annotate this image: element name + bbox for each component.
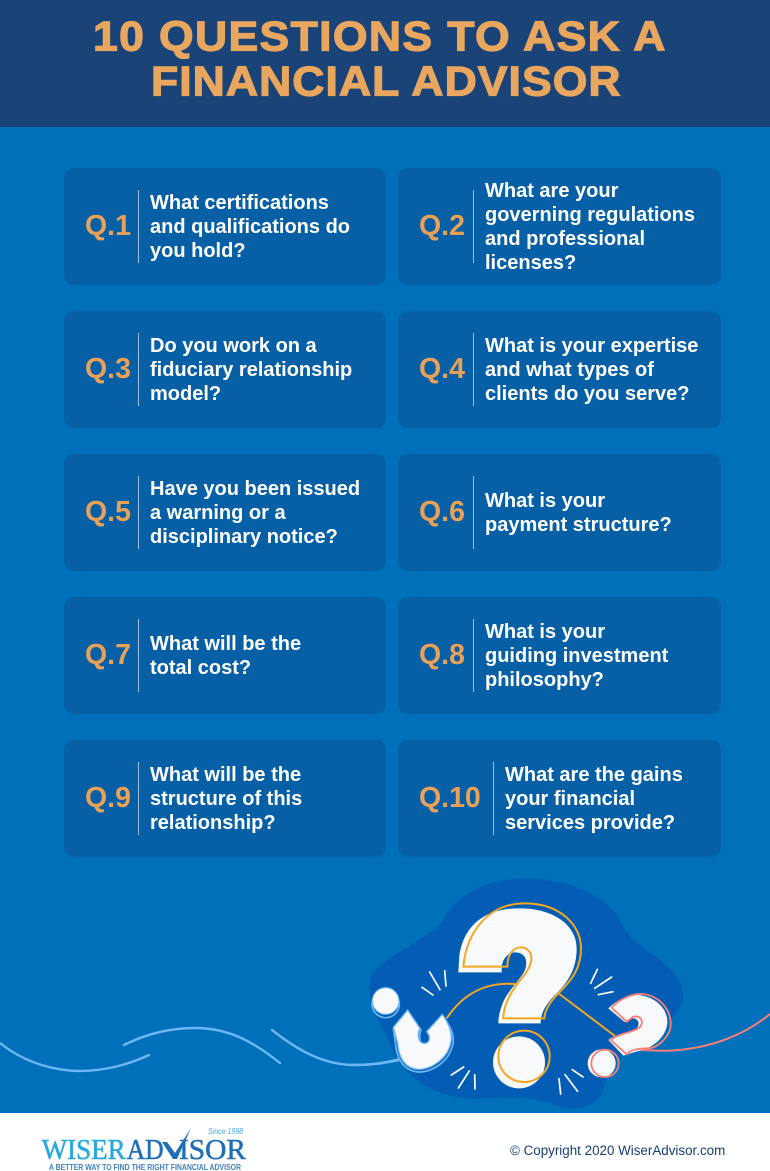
card: question 10: Q.10 [419, 782, 481, 814]
card: question 6: What is your [485, 490, 605, 512]
card: question 4 [398, 311, 721, 428]
card: question 4: clients do you serve? [485, 382, 690, 404]
card: question 10: What are the gains [505, 764, 683, 786]
card: question 8: Q.8 [419, 639, 465, 671]
card: question 10: your financial [505, 788, 635, 810]
card: question 5: disciplinary notice? [150, 526, 338, 548]
card: question 3 [64, 311, 386, 428]
logo: WiserAdvisor: AD [127, 1135, 164, 1166]
logo: WiserAdvisor: Since 1998 [208, 1127, 243, 1136]
card: question 9: Q.9 [85, 782, 131, 814]
card: question 5: Have you been issued [150, 478, 360, 500]
card: question 8: guiding investment [485, 644, 668, 666]
title [93, 14, 666, 105]
card: question 6: Q.6 [419, 496, 465, 528]
connecting lines [350, 984, 770, 1065]
card: question 2 [398, 168, 721, 285]
card: question 1 [64, 168, 386, 285]
card: question 2: What are your [485, 180, 618, 202]
title: FINANCIAL ADVISOR [151, 59, 621, 105]
logo: WiserAdvisor: WISER [42, 1135, 126, 1166]
card: question 5: a warning or a [150, 502, 286, 524]
card: question 3: Do you work on a [150, 334, 317, 356]
copyright: © Copyright 2020 WiserAdvisor.com [510, 1143, 725, 1158]
card: question 8 [398, 597, 721, 714]
illustration: question marks and wavy lines [0, 878, 770, 1108]
logo: WiserAdvisor: ISOR [179, 1135, 246, 1166]
card: question 3: fiduciary relationship [150, 358, 352, 380]
card: question 4: and what types of [485, 358, 654, 380]
card: question 4: Q.4 [419, 353, 465, 385]
big question mark [458, 903, 581, 1088]
card: question 2: governing regulations [485, 204, 695, 226]
card: question 4: What is your expertise [485, 334, 698, 356]
card: question 3: model? [150, 382, 221, 404]
card: question 7 [64, 597, 386, 714]
card: question 9: structure of this [150, 788, 302, 810]
card: question 7: Q.7 [85, 639, 131, 671]
card: question 7: total cost? [150, 656, 251, 678]
right question mark [588, 994, 671, 1077]
left inverted question mark [372, 988, 453, 1072]
card: question 5 [64, 454, 386, 571]
card: question 1: and qualifications do [150, 216, 350, 238]
card: question 8: What is your [485, 620, 605, 642]
card: question 5: Q.5 [85, 496, 131, 528]
card: question 6: payment structure? [485, 514, 672, 536]
card: question 10: services provide? [505, 812, 675, 834]
card: question 10 [398, 740, 721, 857]
card: question 1: you hold? [150, 240, 246, 262]
card: question 2: Q.2 [419, 210, 465, 242]
card: question 8: philosophy? [485, 668, 604, 690]
card: question 3: Q.3 [85, 353, 131, 385]
card: question 9 [64, 740, 386, 857]
card: question 6 [398, 454, 721, 571]
logo: WiserAdvisor [42, 1127, 246, 1171]
card: question 1: Q.1 [85, 210, 131, 242]
card: question 1: What certifications [150, 192, 329, 214]
card: question 7: What will be the [150, 632, 301, 654]
header band [0, 0, 770, 127]
footer band [0, 1113, 770, 1171]
card: question 2: and professional [485, 228, 645, 250]
emphasis ticks [422, 969, 613, 1094]
card: question 2: licenses? [485, 252, 576, 274]
card: question 9: relationship? [150, 812, 276, 834]
title: 10 QUESTIONS TO ASK A [93, 14, 665, 60]
card: question 9: What will be the [150, 764, 301, 786]
